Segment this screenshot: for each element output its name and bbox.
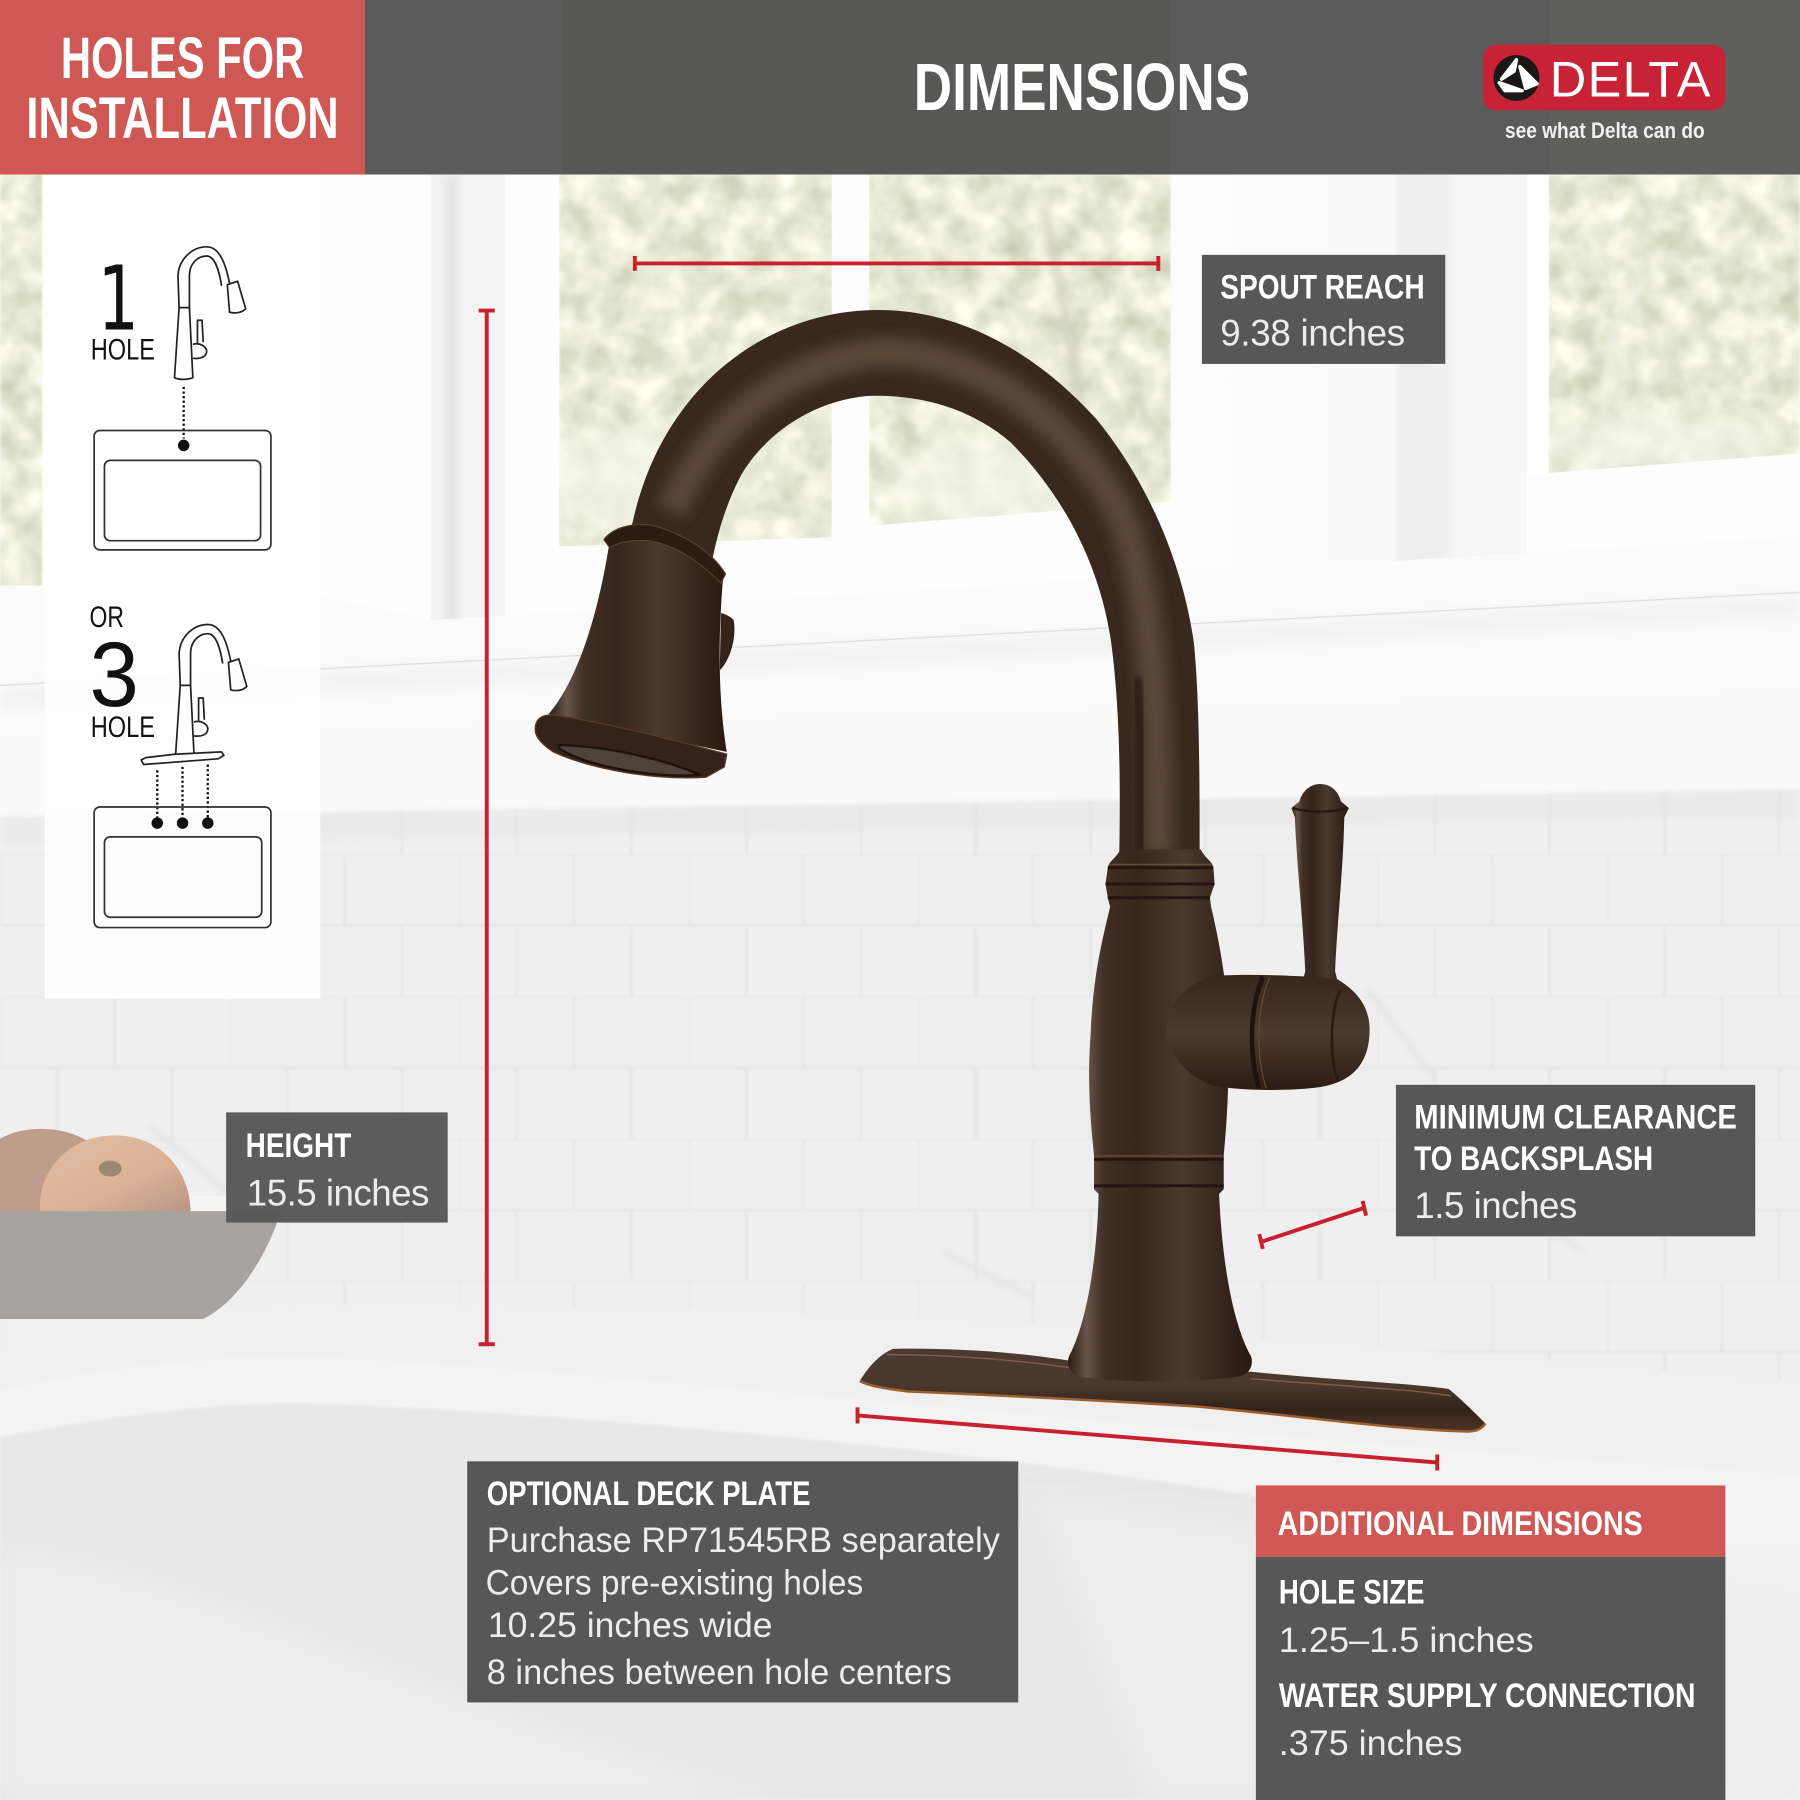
spout [629, 310, 1200, 855]
water supply connection: .375 inches [1279, 1723, 1462, 1763]
callout: height [226, 1112, 448, 1223]
three hole option [90, 601, 271, 928]
heading: holes for installation: HOLES FOR [61, 26, 304, 91]
faucet body [1068, 849, 1252, 1382]
icon: faucet line drawing [174, 247, 246, 379]
panel: additional dimensions [1256, 1485, 1725, 1800]
water supply connection: WATER SUPPLY CONNECTION [1279, 1677, 1696, 1715]
dotted connector [183, 387, 185, 439]
fruit bowl with peaches [0, 1129, 281, 1319]
deck plate [860, 1349, 1485, 1432]
label: hole: HOLE [91, 711, 155, 744]
faucet [535, 310, 1485, 1432]
arrow: height dimension [479, 310, 495, 1344]
callout: optional deck plate [467, 1461, 1018, 1702]
arrow: spout reach dimension [635, 256, 1158, 271]
icon: sink outline [94, 430, 271, 550]
header grey band [0, 0, 1800, 174]
panel: holes for installation [45, 174, 320, 999]
callout: spout reach [1202, 255, 1445, 364]
arrow: backsplash clearance dimension [1259, 1201, 1366, 1249]
callout: optional deck plate: 8 inches between hole centers [487, 1652, 952, 1692]
callout: minimum clearance: 1.5 inches [1414, 1185, 1577, 1226]
callout: minimum clearance [1396, 1085, 1755, 1236]
callout: optional deck plate: OPTIONAL DECK PLATE [487, 1475, 810, 1513]
arrow: deck plate width dimension [858, 1407, 1437, 1471]
hole size: HOLE SIZE [1279, 1574, 1425, 1612]
callout: spout reach: 9.38 inches [1220, 313, 1405, 354]
spray head [535, 525, 734, 778]
panel header [1256, 1485, 1725, 1557]
header red tab [0, 0, 365, 174]
header bar [0, 0, 1800, 174]
handle lever [1291, 784, 1349, 985]
label: hole: HOLE [91, 333, 155, 366]
callout: spout reach: SPOUT REACH [1220, 268, 1425, 306]
heading: holes for installation: INSTALLATION [26, 86, 339, 151]
callout: optional deck plate: Covers pre-existing holes [486, 1563, 863, 1603]
handle hub [1166, 975, 1370, 1090]
callout: height: HEIGHT [246, 1127, 351, 1165]
callout: minimum clearance: TO BACKSPLASH [1414, 1140, 1653, 1178]
delta logo [1483, 45, 1725, 143]
callout: optional deck plate: 10.25 inches wide [488, 1605, 773, 1645]
icon: sink outline [94, 807, 271, 928]
callout: minimum clearance: MINIMUM CLEARANCE [1414, 1098, 1737, 1136]
dotted connectors [157, 765, 208, 817]
icon: faucet with deck plate [141, 624, 247, 765]
label: or: OR [90, 601, 124, 634]
hole size [1279, 1574, 1534, 1660]
window view: foliage [0, 174, 1800, 588]
window frame [0, 174, 1800, 680]
one hole option [91, 247, 271, 550]
numeral 1: 1 [98, 247, 139, 351]
backsplash tiles [0, 790, 1800, 1412]
countertop [0, 1305, 1800, 1800]
water supply connection [1279, 1677, 1696, 1763]
hole size: 1.25–1.5 inches [1279, 1620, 1534, 1660]
callout: height: 15.5 inches [247, 1172, 429, 1213]
window sill [0, 536, 1800, 817]
numeral 3: 3 [90, 624, 139, 726]
heading: holes for installation [26, 26, 339, 151]
panel header: ADDITIONAL DIMENSIONS [1278, 1505, 1643, 1543]
callout: optional deck plate: Purchase RP71545RB separately [487, 1520, 1000, 1560]
heading: dimensions: DIMENSIONS [914, 51, 1250, 125]
delta logo: see what Delta can do [1505, 118, 1705, 143]
delta logo: DELTA [1550, 50, 1711, 107]
